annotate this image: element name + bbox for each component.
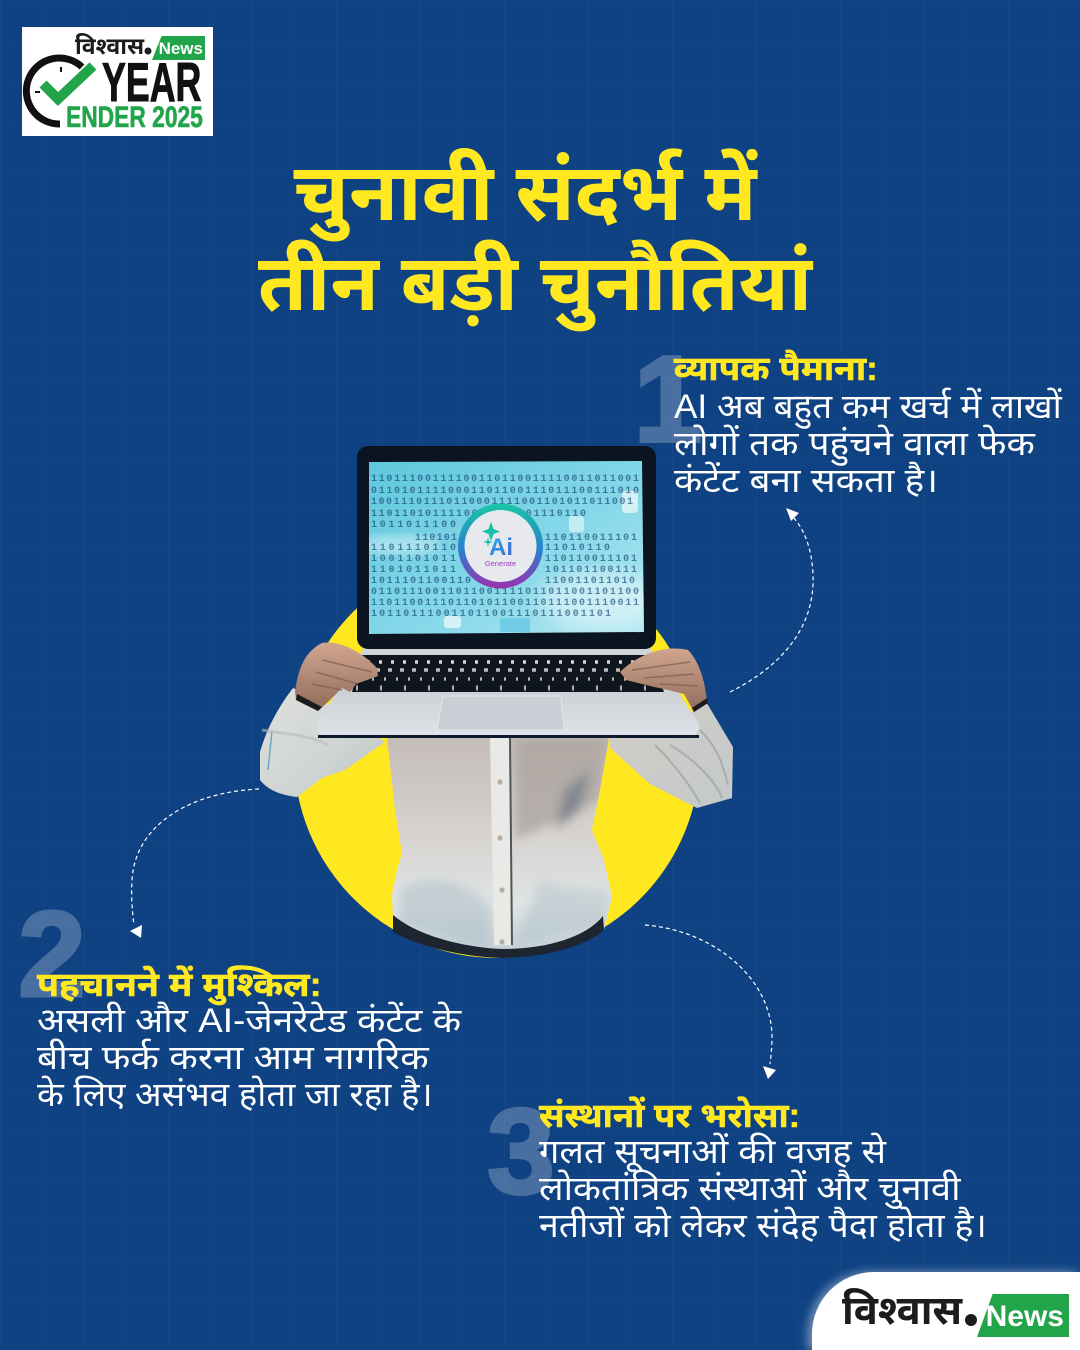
footer dot <box>965 1314 977 1326</box>
laptop lid and screen: 11011100111100110110011110011011001 <box>371 474 639 485</box>
arrow 2 <box>132 789 259 925</box>
logo ENDER 2025: ENDER 2025 <box>66 101 203 134</box>
laptop lid and screen: 110101 <box>415 533 457 544</box>
body 1: कंटेंट बना सकता है। <box>674 462 938 500</box>
laptop lid and screen: 101101100111 <box>545 565 637 576</box>
laptop lid and screen: 1011101100110 <box>371 576 471 587</box>
body 3 <box>539 1132 987 1245</box>
body 3: लोकतांत्रिक संस्थाओं और चुनावी <box>539 1170 960 1208</box>
callout 3: trust <box>487 1083 987 1245</box>
arrowhead 1 <box>786 508 799 521</box>
laptop lid and screen: 10011101110110001111001101011011001 <box>371 497 633 508</box>
yellow circle <box>294 552 700 958</box>
arrow 3 <box>645 925 772 1064</box>
laptop base <box>317 648 699 738</box>
left arm <box>260 688 385 797</box>
body 2: के लिए असंभव होता जा रहा है। <box>37 1076 433 1114</box>
laptop lid and screen: 01101011110001101100111011100111010 <box>371 486 639 497</box>
right hand <box>620 648 708 712</box>
logo clock and check icon <box>22 48 152 128</box>
right arm <box>610 695 733 808</box>
laptop lid and screen: 110011011010 <box>545 576 635 587</box>
arrowhead 2 <box>130 925 142 938</box>
laptop lid and screen: 01101110011011001111011011001101100 <box>371 587 639 598</box>
AI generate badge <box>458 504 543 588</box>
title line 2: तीन बड़ी चुनौतियां <box>258 238 812 327</box>
heading 2: पहचानने में मुश्किल: <box>37 966 322 1004</box>
body 3: गलत सूचनाओं की वजह से <box>539 1133 886 1171</box>
title line 1: चुनावी संदर्भ में <box>293 148 757 237</box>
callout 2: identification <box>18 886 462 1114</box>
body 2 <box>37 1002 462 1114</box>
body 1 <box>674 388 1062 500</box>
laptop lid and screen: 110110011101 <box>545 533 637 544</box>
heading 3: संस्थानों पर भरोसा: <box>539 1097 800 1135</box>
footer wordmark: विश्‍वास <box>842 1289 962 1333</box>
body 2: असली और AI-जेनरेटेड कंटेंट के <box>37 1002 461 1040</box>
laptop lid and screen: 1101101011110011011001110110 <box>371 509 586 520</box>
laptop lid and screen: 1011011100 <box>371 520 456 531</box>
number 3: 3 <box>487 1083 555 1219</box>
laptop lid and screen <box>357 446 660 649</box>
AI generate badge: Ai <box>489 534 513 561</box>
laptop lid and screen: 1101011011 <box>371 565 456 576</box>
number 2: 2 <box>18 886 86 1022</box>
shirt torso <box>387 738 612 958</box>
title <box>258 148 814 332</box>
laptop lid and screen: 1001101011 <box>371 554 456 565</box>
body 3: नतीजों को लेकर संदेह पैदा होता है। <box>539 1207 987 1245</box>
logo news tag: News <box>159 39 203 58</box>
laptop lid and screen: 11010110 <box>545 543 610 554</box>
body 2: बीच फर्क करना आम नागरिक <box>37 1039 429 1077</box>
laptop lid and screen: 11011001110110101100110111001110011 <box>371 598 639 609</box>
laptop lid and screen: 101101110011011001110111001101 <box>371 609 611 620</box>
arrowhead 3 <box>763 1066 776 1079</box>
footer news tag <box>977 1294 1069 1337</box>
logo: Vishwas News Year Ender 2025 <box>22 27 213 136</box>
logo wordmark: विश्‍वास <box>75 33 144 59</box>
AI generate badge: Generate <box>485 559 516 568</box>
logo news tag <box>152 36 205 60</box>
arrow 1 <box>730 517 813 692</box>
footer logo tab <box>812 1272 1080 1350</box>
heading 1: व्यापक पैमाना: <box>674 350 878 388</box>
body 1: AI अब बहुत कम खर्च में लाखों <box>674 388 1062 426</box>
body 1: लोगों तक पहुंचने वाला फेक <box>674 424 1035 462</box>
logo YEAR: YEAR <box>102 51 201 113</box>
illustration: person holding laptop with yellow circle <box>130 446 814 1079</box>
callout 1: scale <box>634 331 1062 500</box>
laptop lid and screen: 1101110110 <box>371 543 456 554</box>
laptop lid and screen: 110110011101 <box>545 554 637 565</box>
number 1: 1 <box>634 331 702 467</box>
left hand <box>295 643 378 711</box>
footer news tag: News <box>986 1300 1064 1333</box>
